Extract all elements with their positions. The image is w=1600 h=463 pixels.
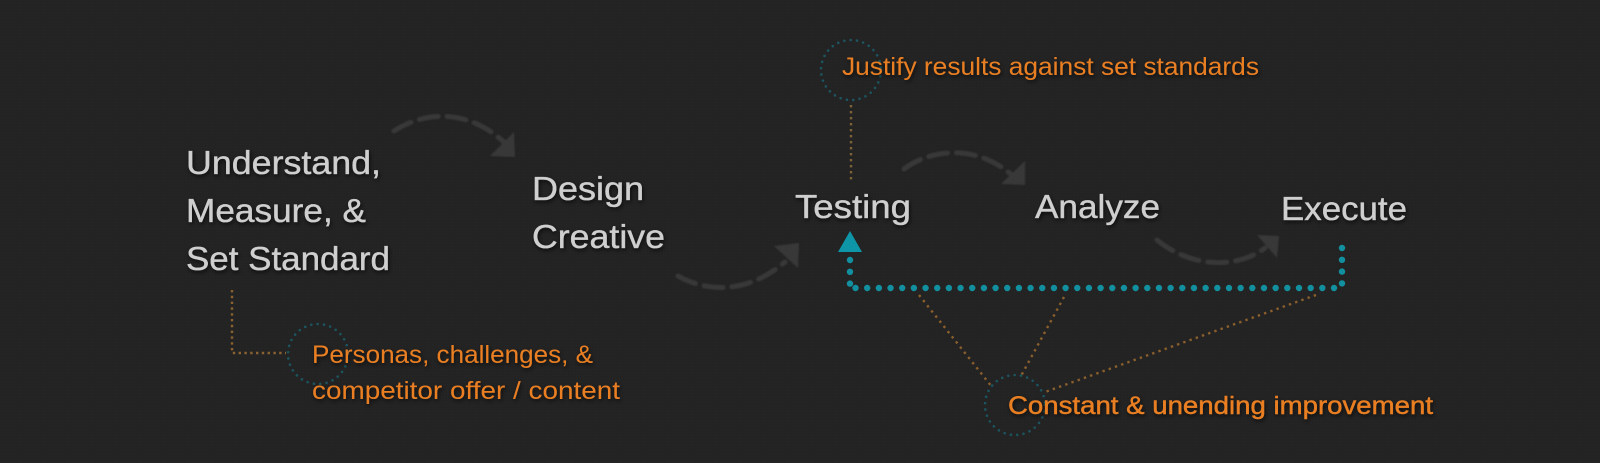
- icon: teal arrowhead: [838, 231, 862, 252]
- circle: personas: [288, 324, 348, 384]
- step: measure: Measure, &: [186, 192, 366, 229]
- connector: testing to justify: [850, 105, 852, 181]
- step: testing: Testing: [795, 188, 911, 225]
- arrow: testing to analyze: [904, 153, 1025, 185]
- circle: justify: [821, 40, 881, 100]
- arrow: understand to design: [394, 116, 515, 157]
- step: understand: Understand,: [186, 144, 381, 181]
- step: set standard: Set Standard: [186, 240, 390, 277]
- step: analyze: Analyze: [1035, 188, 1160, 225]
- arrow: analyze to execute: [1157, 235, 1279, 263]
- step: creative: Creative: [532, 218, 665, 255]
- step: design: Design: [532, 170, 644, 207]
- feedback loop: teal dotted line: [850, 248, 1342, 288]
- connectors: improvement to feedback loop: [919, 295, 1316, 392]
- note: competitor: competitor offer / content: [312, 377, 620, 405]
- circle: constant improvement: [985, 375, 1045, 435]
- arrow: design to testing: [678, 243, 799, 288]
- note: constant improvement: Constant & unending improvement: [1008, 392, 1433, 420]
- connector: standard to personas: [232, 290, 286, 353]
- note: justify results: Justify results against set standards: [842, 53, 1259, 81]
- note: personas: Personas, challenges, &: [312, 341, 593, 369]
- step: execute: Execute: [1281, 190, 1407, 227]
